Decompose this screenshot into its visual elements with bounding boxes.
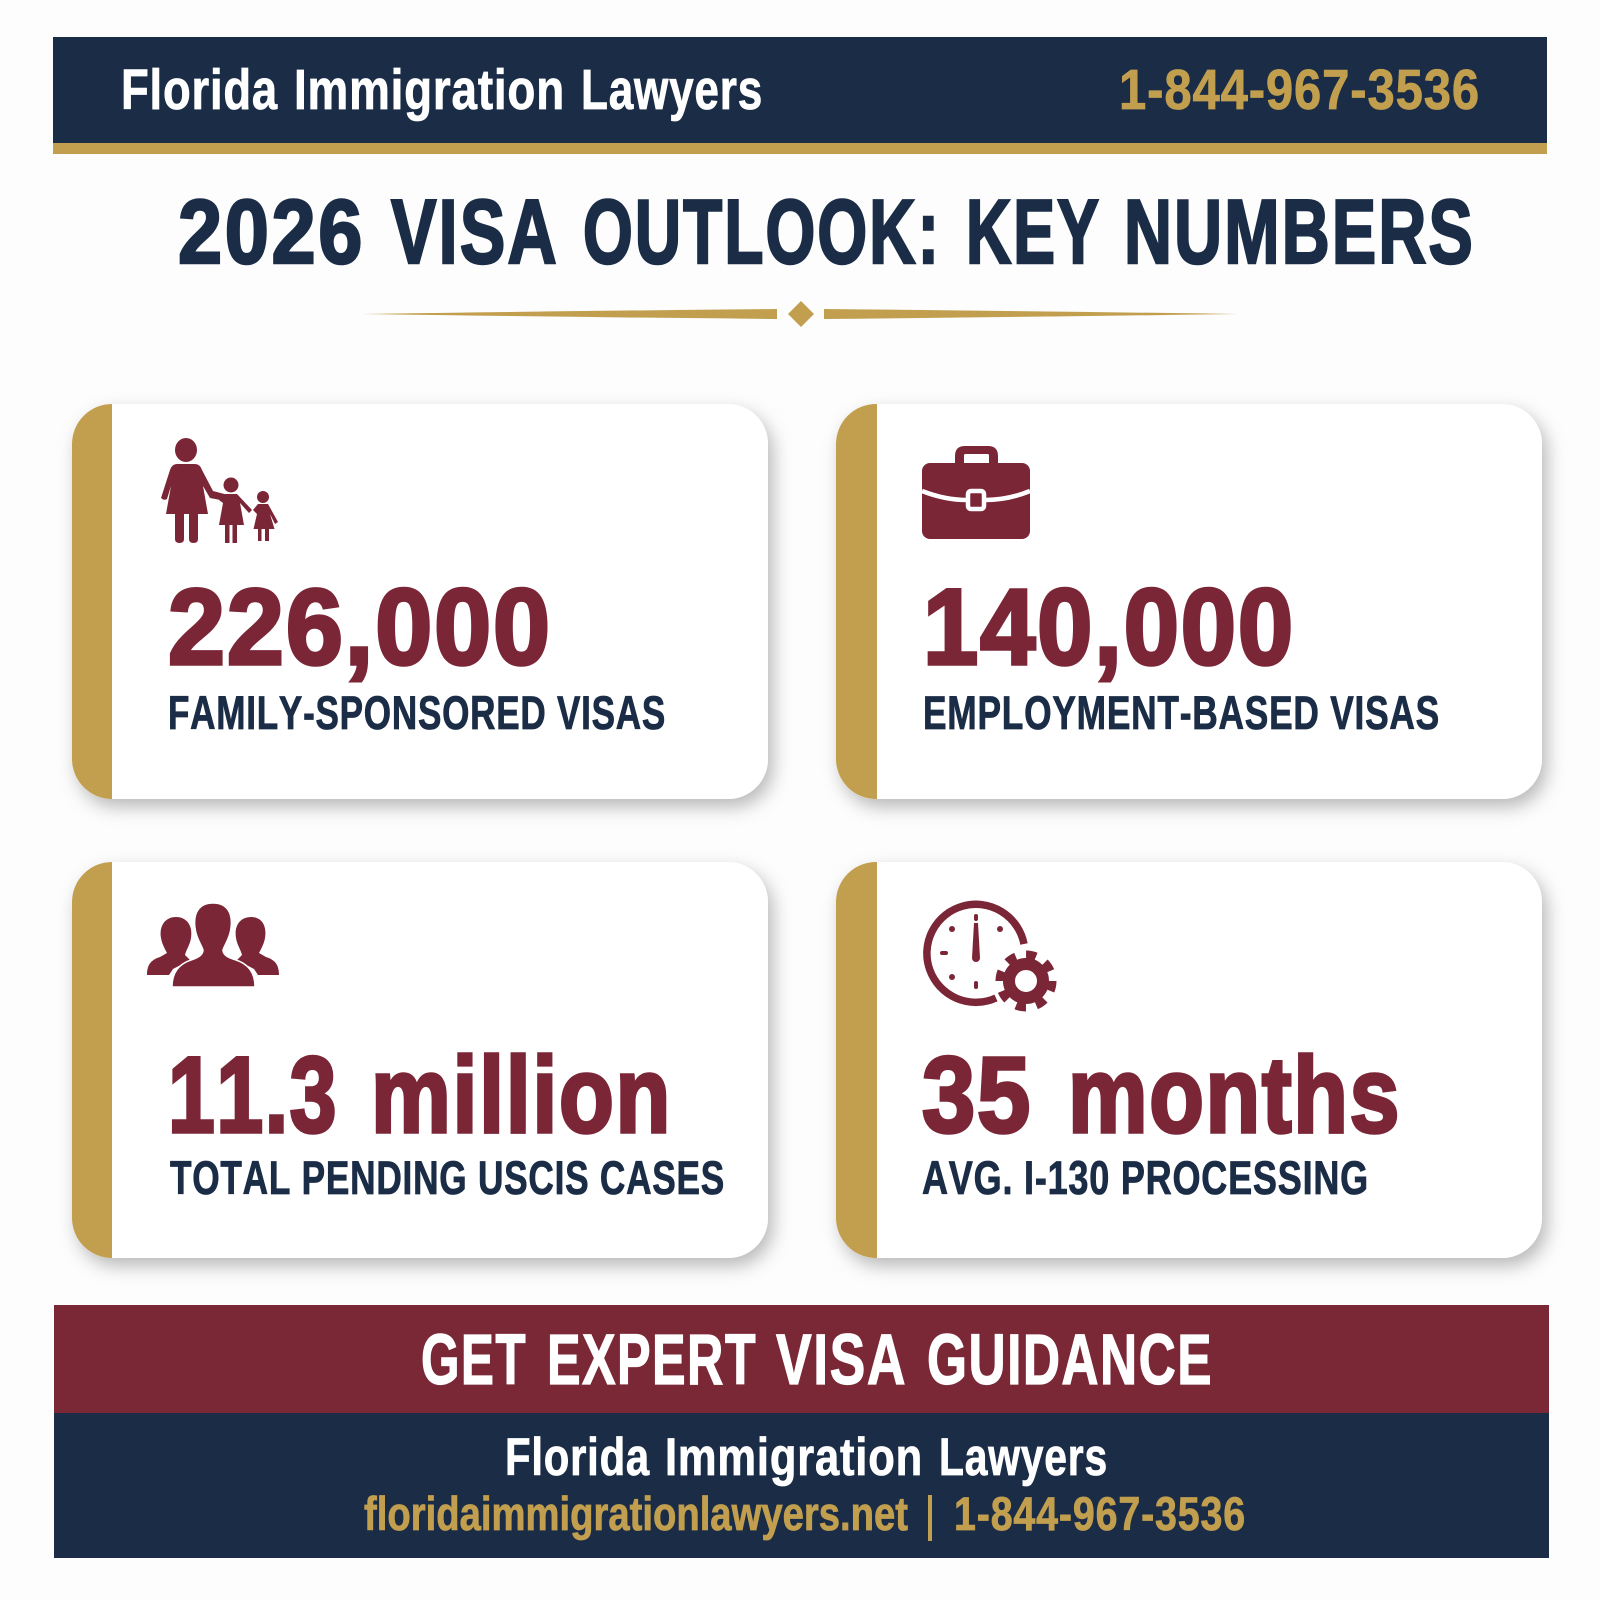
panel: employment-based visas <box>836 404 1542 799</box>
icon: clock with gear <box>927 904 1052 1007</box>
header firm name: Lawyers <box>581 58 763 122</box>
call to action heading: EXPERT <box>547 1321 757 1400</box>
call to action heading: GET <box>421 1321 527 1400</box>
stat: 140,000: 140,000 <box>923 566 1295 687</box>
label: family-sponsored visas: FAMILY-SPONSORED VISAS <box>168 686 666 739</box>
header banner <box>53 37 1547 154</box>
stat: 11.3 million: million <box>371 1034 672 1155</box>
title: OUTLOOK: <box>583 182 941 283</box>
call to action band <box>54 1305 1549 1413</box>
footer firm name: Lawyers <box>939 1428 1108 1487</box>
header phone number: 1-844-967-3536 <box>1119 58 1480 122</box>
stat: 35 months: 35 <box>922 1034 1032 1155</box>
footer separator <box>928 1495 932 1541</box>
label: total pending uscis cases: TOTAL PENDING USCIS CASES <box>170 1151 725 1204</box>
title: VISA <box>391 182 559 283</box>
icon: group of people <box>147 903 279 987</box>
icon: family of mother and two children <box>161 438 278 543</box>
header firm name: Florida <box>121 58 278 122</box>
title divider with diamond <box>362 301 1238 327</box>
footer phone number: 1-844-967-3536 <box>954 1487 1246 1540</box>
call to action heading: GUIDANCE <box>927 1321 1213 1400</box>
panel: avg i-130 processing <box>836 862 1542 1258</box>
call to action heading: VISA <box>776 1321 907 1400</box>
footer firm name: Immigration <box>665 1428 923 1487</box>
title: NUMBERS <box>1124 182 1475 283</box>
panel: family-sponsored visas <box>72 404 768 799</box>
label: employment-based visas: EMPLOYMENT-BASED VISAS <box>923 686 1440 739</box>
footer website: floridaimmigrationlawyers.net <box>364 1487 908 1540</box>
stat: 226,000: 226,000 <box>168 566 552 687</box>
panel: total pending uscis cases <box>72 862 768 1258</box>
title: KEY <box>966 182 1101 283</box>
footer contact band <box>54 1413 1549 1558</box>
stat: 35 months: months <box>1068 1034 1401 1155</box>
footer firm name: Florida <box>505 1428 650 1487</box>
label: avg i-130 processing: AVG. I-130 PROCESSING <box>922 1151 1369 1204</box>
title: 2026 <box>178 182 365 283</box>
icon: briefcase <box>922 446 1030 539</box>
header firm name: Immigration <box>294 58 565 122</box>
stat: 11.3 million: 11.3 <box>168 1034 338 1155</box>
